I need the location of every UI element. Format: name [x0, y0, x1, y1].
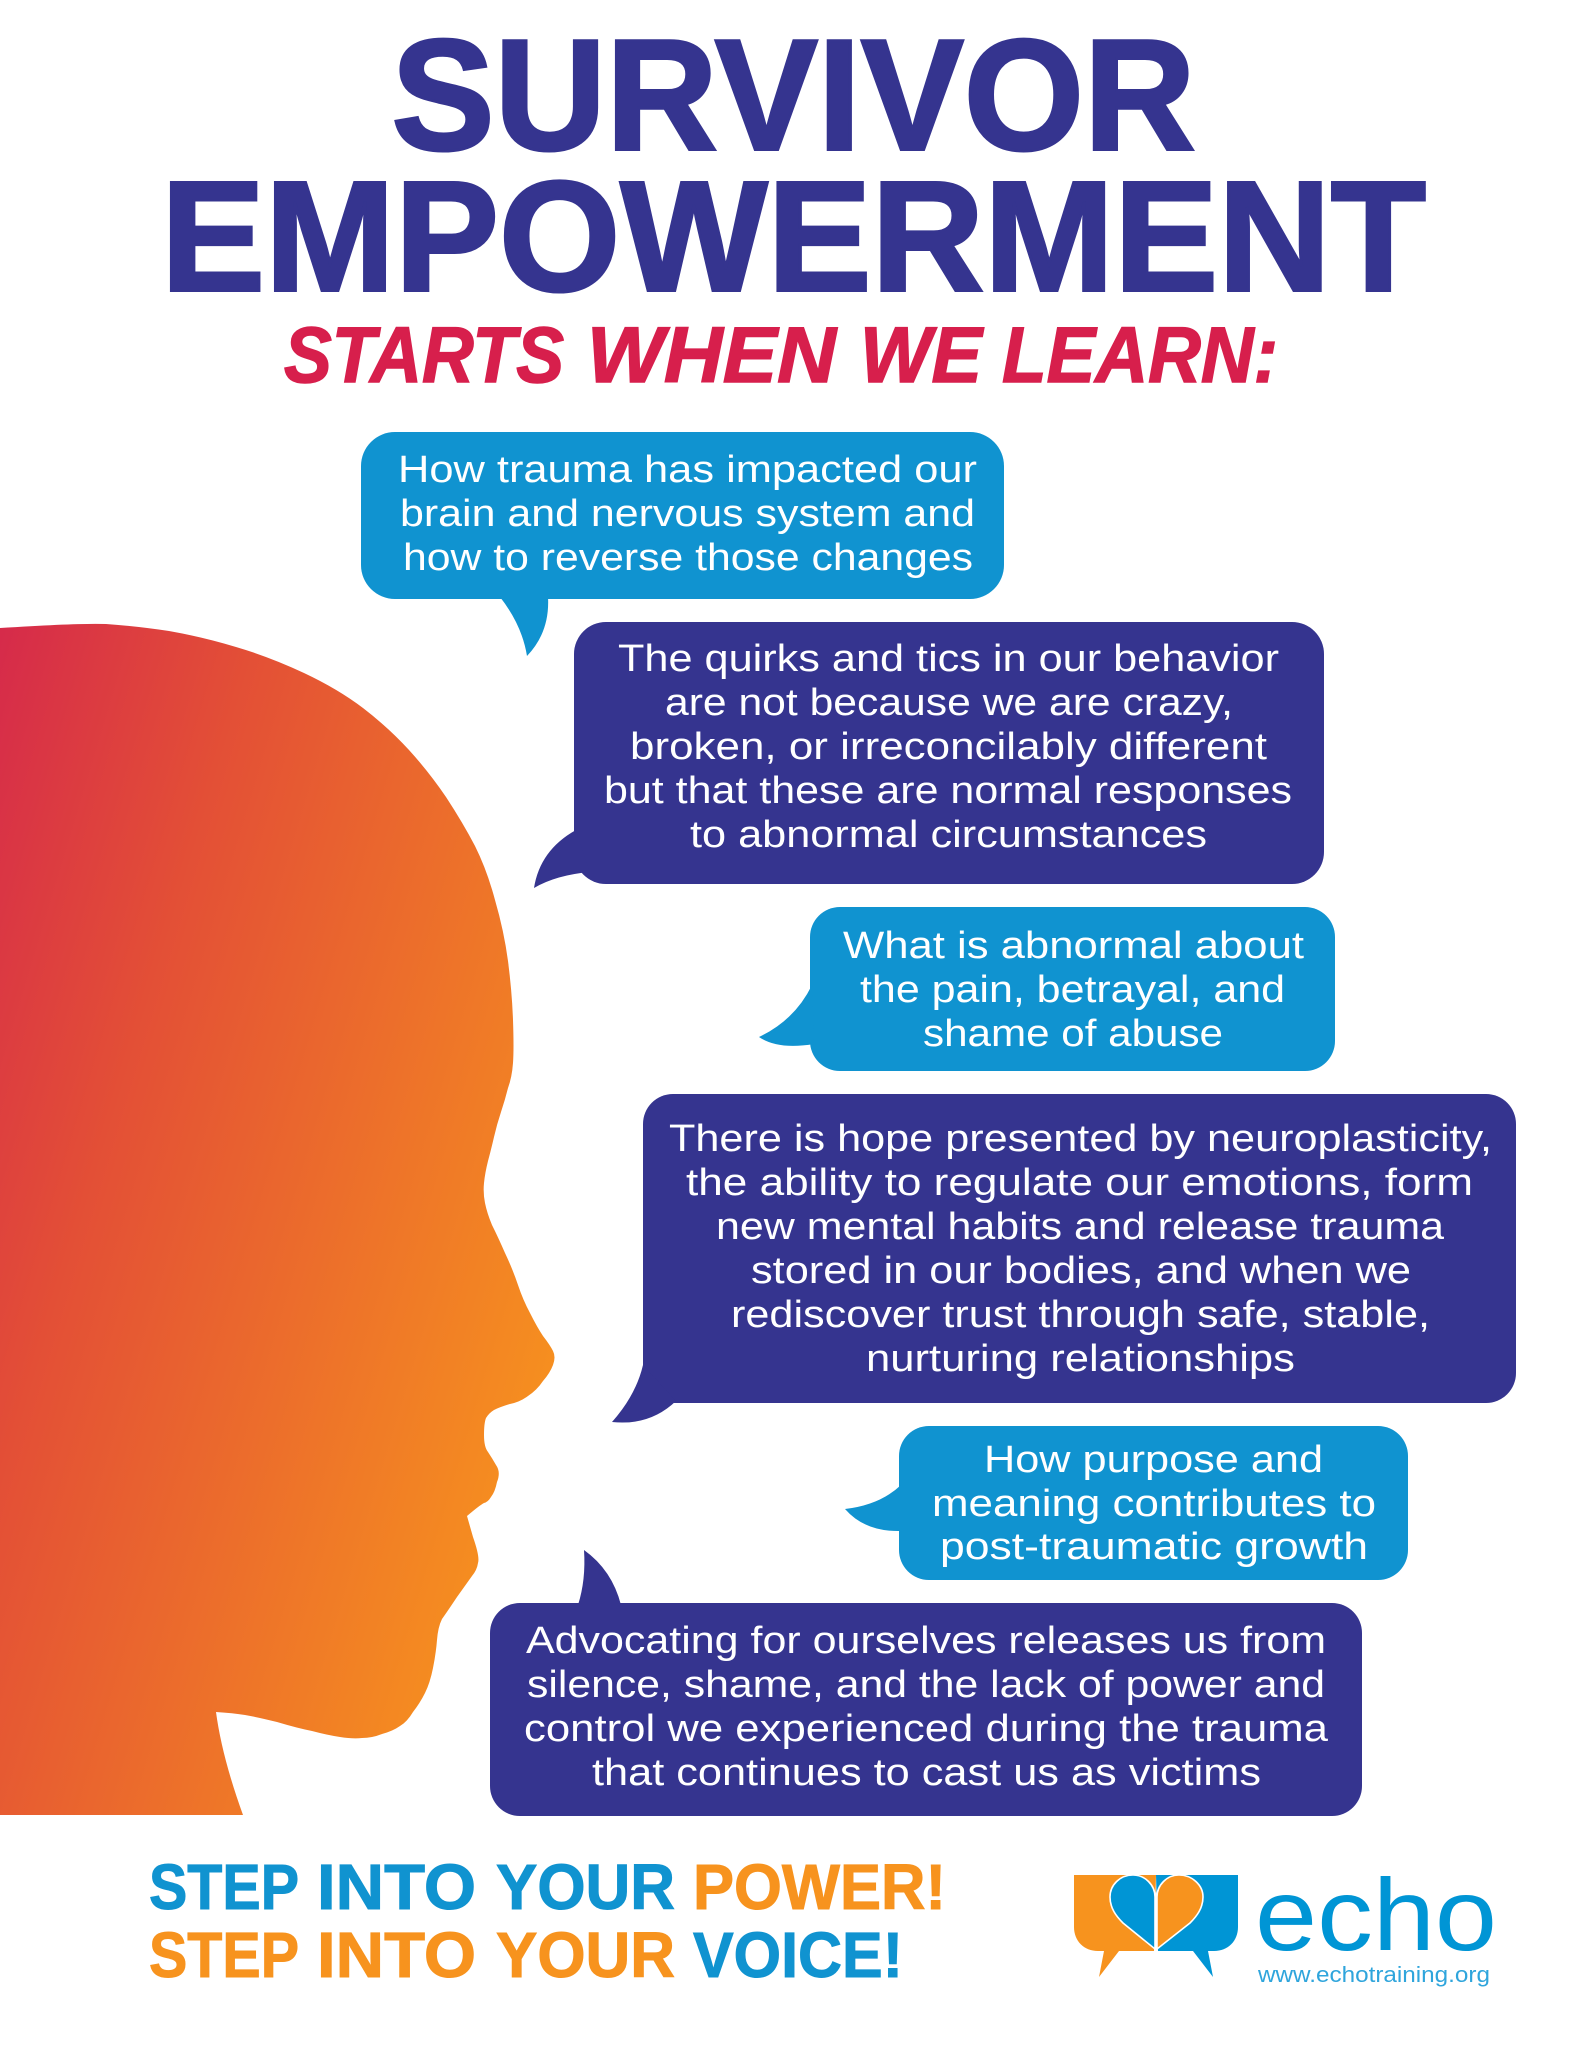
speech bubble 5: purpose and meaning: meaning contributes to	[932, 1483, 1376, 1525]
speech bubble 1: trauma and the brain: how to reverse those changes	[403, 537, 973, 579]
logo url: www.echotraining.org	[1257, 1962, 1490, 1987]
speech bubble 6: advocating for ourselves	[490, 1550, 1362, 1816]
title: SURVIVOR EMPOWERMENT: EMPOWERMENT	[161, 150, 1426, 324]
speech bubble 4: hope and neuroplasticity: new mental habits and release trauma	[716, 1206, 1445, 1248]
speech bubble 2: quirks and tics: to abnormal circumstances	[690, 814, 1207, 856]
speech bubble 6: advocating for ourselves: silence, shame, and the lack of power and	[527, 1664, 1325, 1706]
speech bubble 2: quirks and tics: broken, or irreconcilably different	[630, 726, 1268, 768]
speech bubble 1: trauma and the brain	[361, 432, 1004, 656]
footer slogan: YOUR	[496, 1851, 675, 1923]
speech bubble 2: quirks and tics: are not because we are crazy,	[665, 682, 1233, 724]
footer slogan: STEP	[149, 1919, 299, 1991]
speech bubble 3: what is abnormal: shame of abuse	[923, 1013, 1223, 1055]
footer slogan: YOUR	[496, 1919, 675, 1991]
subtitle: starts when we learn: WE	[860, 310, 984, 399]
speech bubble 4: hope and neuroplasticity: rediscover trust through safe, stable,	[731, 1294, 1430, 1336]
icon: heart orange half	[1157, 1875, 1203, 1949]
speech bubble 5: purpose and meaning: post-traumatic growth	[940, 1526, 1368, 1568]
icon: blue speech bubble	[1156, 1875, 1238, 1977]
footer slogan: INTO	[317, 1919, 476, 1991]
speech bubble 1: trauma and the brain: How trauma has impacted our	[398, 449, 977, 491]
speech bubble 5: purpose and meaning: How purpose and	[984, 1439, 1323, 1481]
footer slogan: POWER!	[693, 1851, 946, 1923]
title: SURVIVOR EMPOWERMENT	[161, 8, 1426, 324]
subtitle: starts when we learn: WHEN	[587, 310, 838, 399]
speech bubble 2: quirks and tics	[534, 622, 1324, 888]
speech bubble 3: what is abnormal: the pain, betrayal, and	[860, 969, 1285, 1011]
icon: heart blue half	[1110, 1875, 1155, 1949]
echo logo	[1074, 1858, 1497, 1987]
speech bubble 2: quirks and tics: The quirks and tics in our behavior	[618, 638, 1279, 680]
speech bubble 4: hope and neuroplasticity: There is hope presented by neuroplasticity,	[669, 1118, 1492, 1160]
speech bubble 6: advocating for ourselves: control we experienced during the trauma	[524, 1708, 1329, 1750]
speech bubble 4: hope and neuroplasticity: nurturing relationships	[866, 1338, 1295, 1380]
speech bubble 4: hope and neuroplasticity: stored in our bodies, and when we	[751, 1250, 1411, 1292]
footer slogan: INTO	[317, 1851, 476, 1923]
footer slogan: STEP	[149, 1851, 299, 1923]
speech bubble 4: hope and neuroplasticity	[612, 1094, 1516, 1423]
speech bubble 6: advocating for ourselves: that continues to cast us as victims	[592, 1752, 1261, 1794]
speech bubble 3: what is abnormal: What is abnormal about	[843, 925, 1304, 967]
subtitle: starts when we learn: STARTS	[284, 310, 564, 399]
speech bubble 1: trauma and the brain: brain and nervous system and	[400, 493, 975, 535]
icon: orange speech bubble	[1074, 1875, 1156, 1977]
speech bubble 2: quirks and tics: but that these are normal responses	[604, 770, 1292, 812]
speech bubble 3: what is abnormal	[759, 907, 1335, 1071]
footer slogan	[149, 1851, 946, 1991]
subtitle: starts when we learn: LEARN:	[1002, 310, 1278, 399]
logo wordmark: echo	[1255, 1858, 1497, 1972]
speech bubble 6: advocating for ourselves: Advocating for ourselves releases us from	[526, 1620, 1326, 1662]
title: SURVIVOR EMPOWERMENT: SURVIVOR	[392, 8, 1196, 184]
subtitle: starts when we learn	[284, 310, 1278, 399]
speech bubble 4: hope and neuroplasticity: the ability to regulate our emotions, form	[686, 1162, 1473, 1204]
head silhouette with gradient	[0, 624, 554, 1815]
footer slogan: VOICE!	[693, 1919, 903, 1991]
speech bubble 5: purpose and meaning	[845, 1426, 1408, 1580]
